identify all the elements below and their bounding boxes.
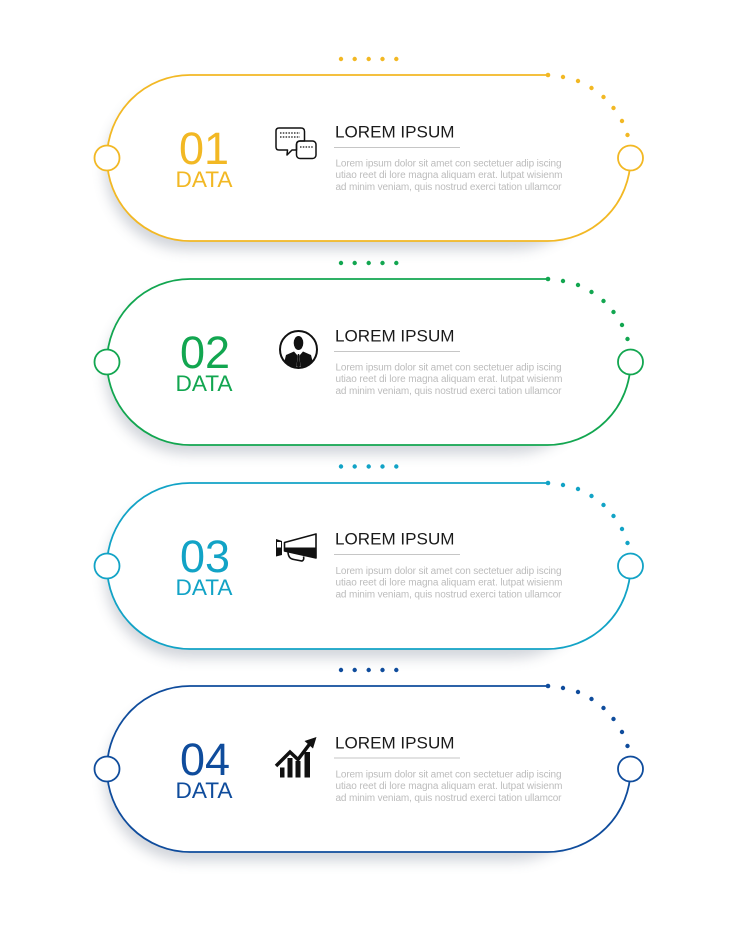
card 01 body text: ad minim veniam, quis nostrud exerci tation ullamcor	[336, 182, 562, 193]
card 02 body text: utiao reet di lore magna aliquam erat. lutpat wisienm	[336, 374, 562, 385]
card 03 body text: Lorem ipsum dolor sit amet con sectetuer adip iscing	[336, 566, 562, 577]
card 02 divider	[334, 351, 460, 352]
card 02 fill	[107, 279, 630, 445]
card 04 top dots	[339, 668, 398, 672]
card 03 shadow	[105, 494, 595, 658]
card 01 body text	[336, 158, 562, 193]
card 04 fill	[107, 686, 630, 852]
card 02 body text	[336, 362, 562, 397]
card 01 data label: DATA	[176, 167, 233, 192]
card 04 heading: LOREM IPSUM	[335, 734, 454, 752]
card 04 number: 04	[180, 734, 230, 785]
panel: card 03	[94, 464, 643, 658]
panel: card 02	[94, 261, 643, 454]
card 01 top dots	[339, 57, 398, 61]
card 03 body text: ad minim veniam, quis nostrud exerci tation ullamcor	[336, 590, 562, 600]
card 02 heading: LOREM IPSUM	[335, 326, 454, 346]
card 03 divider	[334, 554, 460, 555]
card 01 connector circles	[94, 146, 643, 170]
card 04 body text: ad minim veniam, quis nostrud exerci tation ullamcor	[336, 793, 562, 804]
card 02 number: 02	[180, 327, 230, 378]
card 02 body text: ad minim veniam, quis nostrud exerci tation ullamcor	[336, 386, 562, 397]
card 02 connector circles	[94, 350, 643, 374]
card 04 shadow	[105, 697, 595, 861]
card 04 body text	[336, 770, 562, 804]
card 01 outline	[107, 75, 630, 241]
card 03 top dots	[339, 464, 398, 469]
card 04 dotted arc	[546, 684, 630, 748]
card 03 connector circles	[94, 554, 643, 578]
card 03 body text: utiao reet di lore magna aliquam erat. lutpat wisienm	[336, 578, 562, 588]
card 01 divider	[334, 147, 460, 148]
card 01 heading: LOREM IPSUM	[335, 122, 454, 142]
card 04 divider	[334, 758, 460, 759]
card 03 number: 03	[180, 531, 230, 582]
icon: businessman	[280, 331, 317, 368]
card 01 shadow	[105, 86, 595, 250]
card 01 body text: Lorem ipsum dolor sit amet con sectetuer adip iscing	[336, 158, 562, 170]
icon: chat bubbles	[276, 128, 316, 158]
card 02 data label: DATA	[176, 371, 233, 396]
card 01 dotted arc	[546, 73, 630, 137]
card 03 dotted arc	[546, 481, 630, 545]
card 01 number: 01	[179, 123, 229, 174]
card 03 body text	[336, 566, 562, 600]
card 02 body text: Lorem ipsum dolor sit amet con sectetuer adip iscing	[336, 362, 562, 374]
icon: megaphone	[276, 534, 316, 561]
card 03 data label: DATA	[176, 575, 233, 600]
card 02 dotted arc	[546, 277, 630, 341]
panel: card 04	[94, 668, 643, 861]
card 03 heading: LOREM IPSUM	[335, 530, 454, 548]
card 02 top dots	[339, 261, 398, 265]
card 03 outline	[107, 483, 630, 649]
card 04 data label: DATA	[176, 778, 233, 803]
card 04 outline	[107, 686, 630, 852]
card 02 shadow	[105, 290, 595, 454]
card 01 body text: utiao reet di lore magna aliquam erat. lutpat wisienm	[336, 170, 562, 181]
card 03 fill	[107, 483, 630, 649]
card 01 fill	[107, 75, 630, 241]
card 04 connector circles	[94, 756, 643, 782]
panel: card 01	[94, 57, 643, 250]
icon: growth chart	[276, 737, 316, 778]
card 04 body text: Lorem ipsum dolor sit amet con sectetuer adip iscing	[336, 770, 562, 780]
card 02 outline	[107, 279, 630, 445]
card 04 body text: utiao reet di lore magna aliquam erat. lutpat wisienm	[336, 781, 562, 792]
